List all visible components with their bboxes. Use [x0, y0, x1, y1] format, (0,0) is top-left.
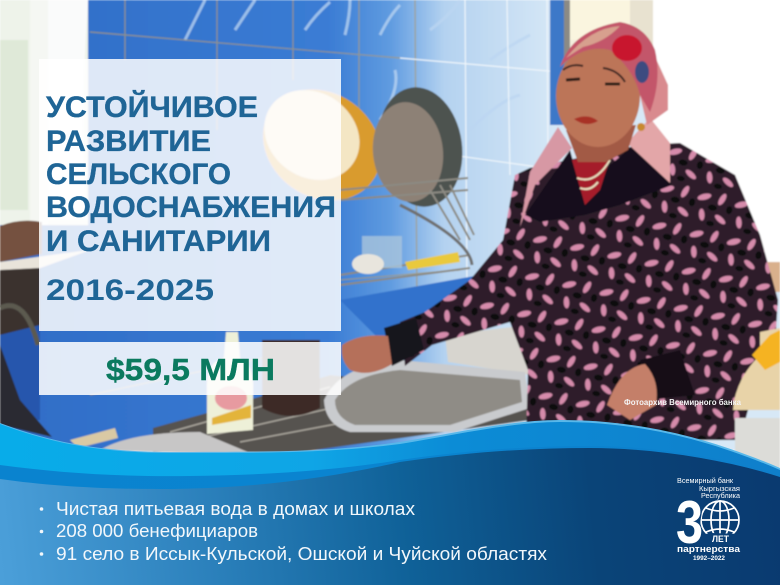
red top and necklace	[572, 152, 612, 205]
detergent bottle	[207, 332, 253, 434]
cuff	[384, 318, 424, 366]
glasses and bowl on rack	[352, 236, 460, 274]
dark jar	[262, 340, 320, 416]
headscarf	[560, 22, 658, 112]
logo: World Bank Kyrgyz Republic 30 years of partnership: Всемирный банк	[677, 476, 734, 485]
title	[46, 90, 336, 258]
title: УСТОЙЧИВОЕ	[46, 90, 258, 124]
dark plate	[368, 82, 470, 212]
wall under counter	[445, 325, 530, 375]
logo: World Bank Kyrgyz Republic 30 years of partnership: ЛЕТ	[712, 534, 729, 545]
dark sleeve by hand	[640, 350, 695, 400]
bag and box at right	[733, 328, 780, 468]
tap	[0, 306, 38, 345]
white basin	[100, 432, 255, 455]
tile highlights	[185, 0, 530, 200]
collar	[525, 140, 672, 222]
left hand	[342, 335, 392, 373]
globe cut-out behind numerals	[695, 500, 740, 545]
orange plate	[241, 67, 403, 223]
key facts list	[40, 499, 547, 564]
counter and sink	[153, 360, 530, 452]
key facts list: 91 село в Иссык-Кульской, Ошской и Чуйской областях	[56, 544, 547, 564]
earring	[637, 123, 645, 131]
title: И САНИТАРИИ	[46, 225, 271, 258]
logo: World Bank Kyrgyz Republic 30 years of partnership: 3	[676, 489, 703, 556]
panel: title background	[39, 59, 341, 331]
lower tile area	[340, 275, 480, 340]
title: СЕЛЬСКОГО	[46, 158, 231, 191]
logo: World Bank Kyrgyz Republic 30 years of partnership: Кыргызская	[699, 484, 740, 493]
panel: funding amount	[39, 342, 341, 395]
photo: woman at a kitchen sink	[0, 0, 780, 468]
project years: 2016-2025	[46, 274, 214, 307]
scarf tails	[520, 127, 572, 227]
dark sleeve lower left	[0, 345, 52, 437]
left sill	[0, 250, 90, 272]
neck	[566, 125, 636, 162]
photo credit: Фотоархив Всемирного банка	[624, 398, 742, 407]
face	[556, 45, 640, 147]
tile grid	[90, 0, 460, 395]
key facts list: 208 000 бенефициаров	[56, 521, 258, 541]
wave footer	[0, 420, 780, 585]
logo: World Bank Kyrgyz Republic 30 years of partnership: Республика	[701, 491, 741, 500]
window sill brown cloth	[0, 221, 42, 262]
dish rack	[340, 178, 474, 285]
title: ВОДОСНАБЖЕНИЯ	[46, 191, 336, 224]
logo: World Bank Kyrgyz Republic 30 years of partnership: 1992–2022	[693, 555, 725, 562]
woman	[342, 22, 778, 440]
left window	[0, 0, 88, 225]
logo: World Bank Kyrgyz Republic 30 years of partnership: партнерства	[677, 544, 741, 555]
dress	[400, 143, 778, 440]
logo: World Bank Kyrgyz Republic 30 years of partnership	[676, 476, 741, 562]
panel: funding amount: $59,5 МЛН	[106, 352, 275, 387]
title: РАЗВИТИЕ	[46, 125, 211, 158]
key facts list: Чистая питьевая вода в домах и школах	[56, 499, 415, 519]
light tile grid	[390, 0, 560, 310]
right window	[550, 0, 780, 292]
right hand	[607, 364, 657, 420]
icon: globe	[701, 501, 739, 539]
